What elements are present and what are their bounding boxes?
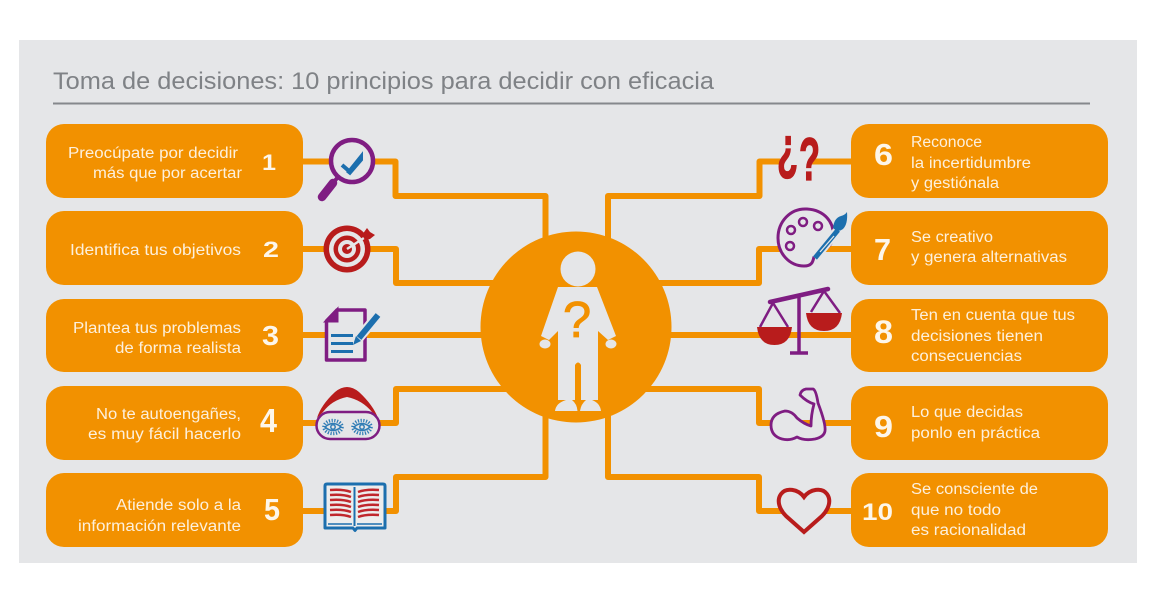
- icon: question marks: ?: [799, 126, 820, 193]
- card 10: Se consciente de: [911, 481, 1038, 498]
- icon: magnifying glass: [322, 140, 373, 197]
- card 5: Atiende solo a la: [116, 497, 241, 514]
- card 10: 10: [862, 499, 893, 526]
- card 7: 7: [874, 232, 891, 267]
- card 4: es muy fácil hacerlo: [88, 426, 241, 443]
- card 9: 9: [874, 409, 893, 444]
- card 6: [851, 124, 1108, 198]
- card 10: que no todo: [911, 502, 1001, 519]
- card 3: [46, 299, 303, 372]
- card 8: Ten en cuenta que tus: [911, 307, 1075, 324]
- icon: open book: [325, 484, 385, 530]
- card 2: Identifica tus objetivos: [70, 242, 241, 259]
- connectors: [303, 162, 851, 511]
- card 9: ponlo en práctica: [911, 425, 1040, 442]
- card 8: 8: [874, 314, 893, 350]
- card 10: [851, 473, 1108, 547]
- card 8: [851, 299, 1108, 372]
- title: Toma de decisiones: 10 principios para decidir con eficacia: [53, 68, 715, 95]
- icon: document and pencil: [326, 310, 378, 360]
- question mark on chest: ?: [563, 291, 591, 348]
- icon: palette and brush: [778, 209, 847, 266]
- card 9: [851, 386, 1108, 460]
- icon: heart: [779, 490, 829, 532]
- card 5: 5: [264, 492, 280, 527]
- card 3: 3: [262, 320, 279, 351]
- card 10: es racionalidad: [911, 522, 1026, 539]
- central circle with person: [480, 232, 672, 422]
- person figure: [540, 252, 616, 411]
- card 9: Lo que decidas: [911, 404, 1023, 421]
- card 8: consecuencias: [911, 348, 1022, 365]
- card 1: más que por acertar: [93, 165, 242, 182]
- card 6: la incertidumbre: [911, 155, 1031, 172]
- card 3: de forma realista: [115, 340, 241, 357]
- card 4: 4: [260, 402, 278, 439]
- icon: target: [324, 226, 375, 272]
- card 7: [851, 211, 1108, 285]
- icon: balance scale: [757, 289, 842, 353]
- icon: flexed arm: [771, 389, 825, 440]
- card 4: [46, 386, 303, 460]
- card 1: [46, 124, 303, 198]
- card 1: Preocúpate por decidir: [68, 145, 238, 162]
- card 2: 2: [263, 237, 279, 262]
- icon: question marks: ¿: [777, 114, 798, 181]
- card 6: 6: [874, 137, 893, 172]
- card 2: [46, 211, 303, 285]
- card 6: Reconoce: [911, 134, 982, 151]
- card 7: y genera alternativas: [911, 249, 1067, 266]
- icon: blindfold mask with eyes: [316, 387, 380, 439]
- card 1: 1: [262, 150, 276, 175]
- card 7: Se creativo: [911, 229, 993, 246]
- card 3: Plantea tus problemas: [73, 320, 241, 337]
- card 6: y gestiónala: [911, 175, 999, 192]
- card 4: No te autoengañes,: [96, 406, 241, 423]
- card 5: [46, 473, 303, 547]
- card 5: información relevante: [78, 518, 241, 535]
- card 8: decisiones tienen: [911, 328, 1043, 345]
